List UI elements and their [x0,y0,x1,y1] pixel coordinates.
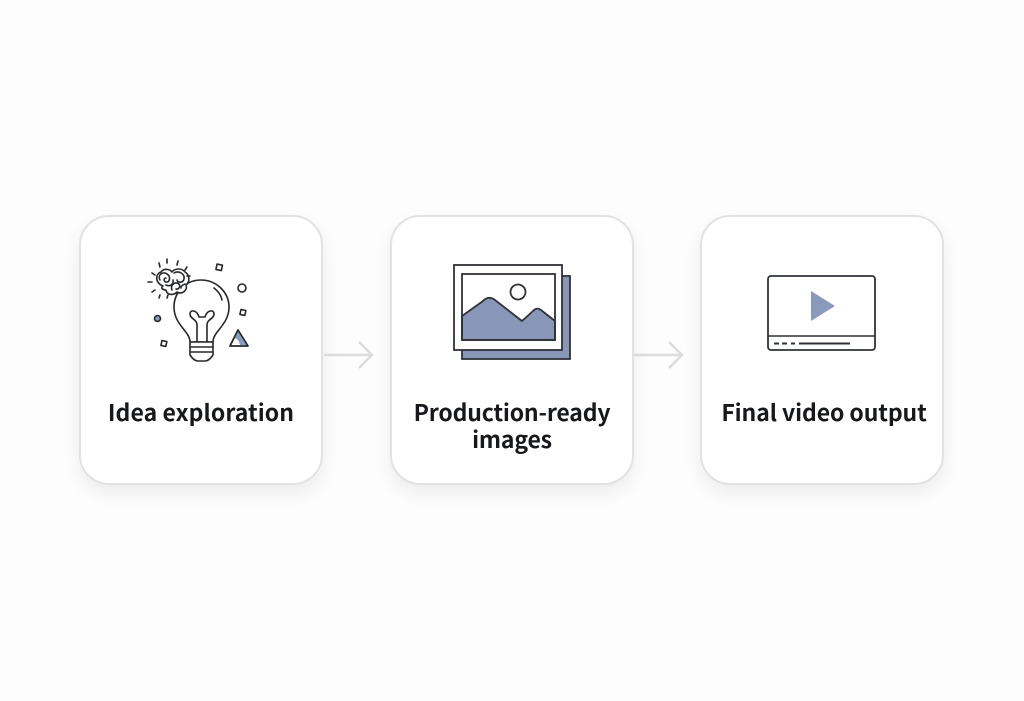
back sheet [462,276,570,359]
bulb glass [174,280,229,342]
mountains [462,298,555,340]
small circle [238,284,246,292]
panel: idea exploration [79,215,323,485]
label: production-ready images [414,394,610,455]
small square right [240,310,246,315]
sparks [148,259,190,298]
triangle [230,330,248,346]
small square top [216,264,222,271]
icon: light bulb with brain and shapes [148,259,248,361]
blue dot [154,316,160,322]
highlight [214,288,222,300]
player frame [768,276,875,350]
panel: final video output [700,215,944,485]
control divider [768,335,875,337]
picture border [462,274,555,340]
label: idea exploration: Idea exploration [108,394,294,428]
icon: stacked images [454,265,570,359]
brain swirl [157,269,189,294]
icon: video player [768,276,875,350]
filament [190,311,214,342]
panel: production-ready images [390,215,634,485]
sun [510,284,526,300]
play triangle [811,291,835,321]
front frame [454,265,562,350]
screw base [190,342,213,361]
label: final video output: Final video output [721,394,927,428]
label: production-ready images: Production-ready [414,394,610,428]
arrow: idea to images [324,342,372,368]
small square lower left [161,341,167,346]
label: production-ready images: images [472,421,552,455]
progress bar [774,342,850,344]
arrow: images to video [634,342,682,368]
